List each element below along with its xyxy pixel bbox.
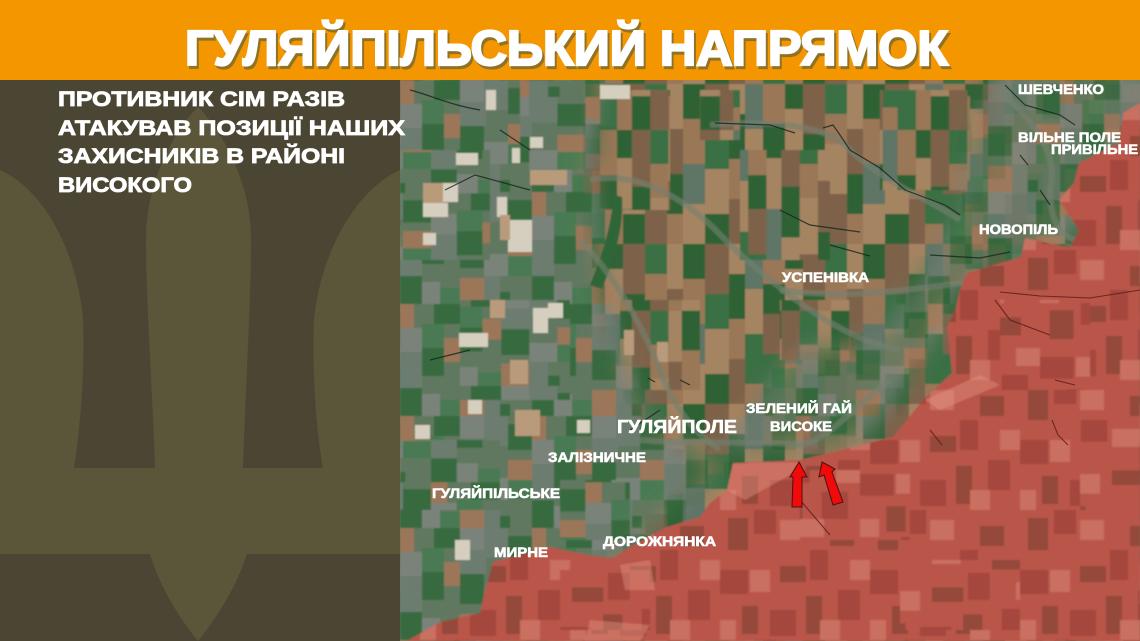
label: Гуляйполе: ГУЛЯЙПОЛЕ <box>617 416 737 437</box>
title: ГУЛЯЙПІЛЬСЬКИЙ НАПРЯМОК <box>187 24 950 79</box>
summary text: ПРОТИВНИК СІМ РАЗІВ <box>58 88 345 111</box>
label: Високе: ВИСОКЕ <box>770 418 832 434</box>
label: Новопіль: НОВОПІЛЬ <box>979 221 1058 237</box>
satellite map <box>385 65 1140 641</box>
bright fields <box>415 85 630 560</box>
trident emblem <box>0 107 400 641</box>
label: Мирне: МИРНЕ <box>494 544 548 560</box>
label: Зелений Гай: ЗЕЛЕНИЙ ГАЙ <box>746 399 852 416</box>
label: Шевченко: ШЕВЧЕНКО <box>1018 81 1104 97</box>
occupied territory <box>407 103 1140 641</box>
title banner <box>0 0 1140 80</box>
river valleys <box>580 90 1075 450</box>
summary text <box>58 88 405 197</box>
summary text: ВИСОКОГО <box>58 174 192 197</box>
label: Вільне Поле: ВІЛЬНЕ ПОЛЕ <box>1018 129 1121 145</box>
summary text: ЗАХИСНИКІВ В РАЙОНІ <box>58 144 345 168</box>
label: Привільне: ПРИВІЛЬНЕ <box>1051 141 1138 157</box>
background panel <box>0 0 400 641</box>
arrow: right attack <box>819 462 843 505</box>
label: Гуляйпільське: ГУЛЯЙПІЛЬСЬКЕ <box>432 484 560 501</box>
title: ГУЛЯЙПІЛЬСЬКИЙ НАПРЯМОК <box>185 21 948 76</box>
summary text: АТАКУВАВ ПОЗИЦІЇ НАШИХ <box>58 117 405 140</box>
arrow: left attack <box>790 462 807 507</box>
label: Дорожнянка: ДОРОЖНЯНКА <box>603 533 716 549</box>
label: Залізничне: ЗАЛІЗНИЧНЕ <box>548 449 646 465</box>
dark creeks <box>410 85 1075 430</box>
label: Успенівка: УСПЕНІВКА <box>782 269 869 285</box>
